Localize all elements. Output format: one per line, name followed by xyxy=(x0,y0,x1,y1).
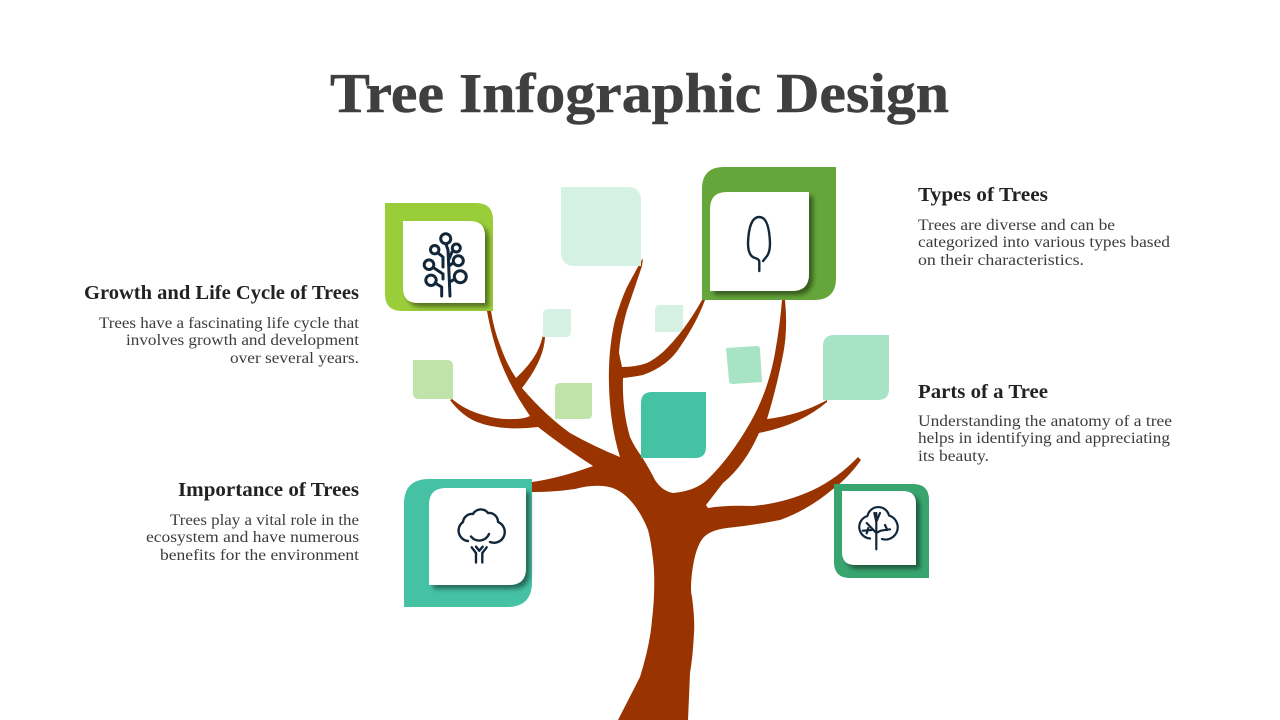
leaf: light lime square left xyxy=(413,360,453,399)
text block: importance of trees: Importance of Trees xyxy=(178,479,359,501)
text block: types of trees: on their characteristics. xyxy=(918,252,1084,269)
text block: types of trees: categorized into various types based xyxy=(918,234,1170,251)
text block: types of trees: Types of Trees xyxy=(918,184,1048,206)
text block: types of trees xyxy=(918,184,1170,269)
leaf: light lime square center xyxy=(555,383,592,419)
text block: importance of trees: benefits for the environment xyxy=(160,547,360,564)
text block: parts of a tree xyxy=(918,381,1172,465)
text block: types of trees: Trees are diverse and can be xyxy=(918,217,1115,234)
text block: parts of a tree: Parts of a Tree xyxy=(918,381,1048,403)
text block: parts of a tree: Understanding the anatomy of a tree xyxy=(918,413,1172,430)
text block: importance of trees xyxy=(146,479,360,564)
card: types icon xyxy=(702,167,836,300)
text block: growth and life cycle: Trees have a fascinating life cycle that xyxy=(99,315,360,332)
text block: importance of trees: ecosystem and have numerous xyxy=(146,529,359,546)
icon: broad cloud tree xyxy=(459,509,505,562)
text block: parts of a tree: its beauty. xyxy=(918,448,989,465)
text block: growth and life cycle: involves growth and development xyxy=(126,332,360,349)
title: Tree Infographic Design xyxy=(330,63,949,125)
card: importance icon xyxy=(404,479,532,607)
text block: growth and life cycle: over several years. xyxy=(230,350,359,367)
leaf: small pale square left xyxy=(543,309,571,337)
text block: growth and life cycle: Growth and Life Cycle of Trees xyxy=(84,282,359,304)
icon: branching tree with circles xyxy=(424,234,466,296)
leaf: large mint square xyxy=(823,335,889,400)
leaf: rotated mint square xyxy=(726,346,762,384)
leaf: teal square xyxy=(641,392,706,458)
tree xyxy=(450,258,861,720)
leaf: small pale square right xyxy=(655,305,683,332)
card: growth icon xyxy=(385,203,493,311)
icon: round tree with branches xyxy=(859,507,898,549)
text block: importance of trees: Trees play a vital role in the xyxy=(170,512,359,529)
icon: single leaf tree xyxy=(748,217,770,271)
text block: parts of a tree: helps in identifying and appreciating xyxy=(918,430,1170,447)
leaf: large pale square xyxy=(561,187,641,266)
card: parts icon xyxy=(834,484,929,578)
text block: growth and life cycle xyxy=(84,282,360,367)
